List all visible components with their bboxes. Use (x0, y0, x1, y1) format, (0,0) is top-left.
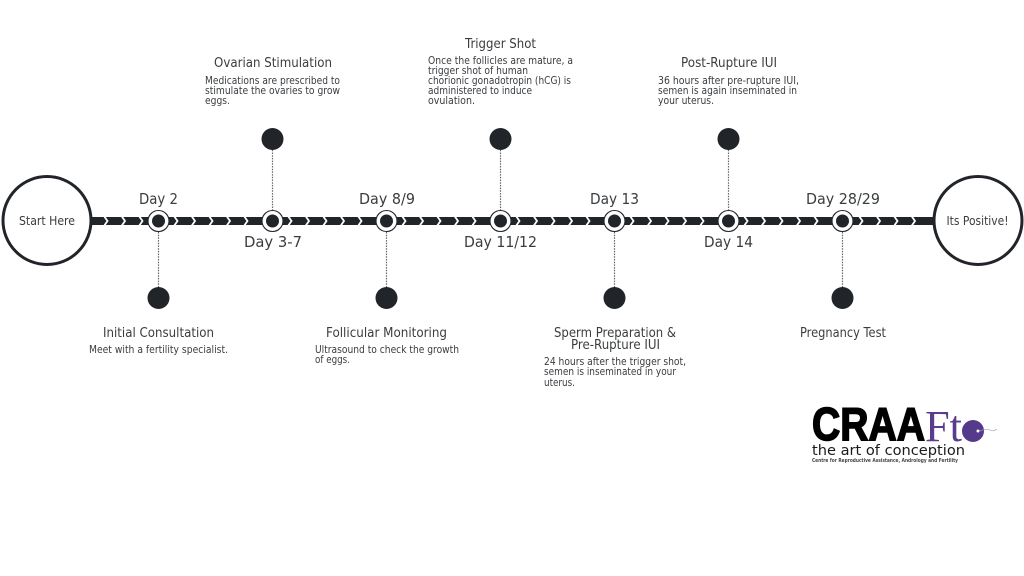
milestone: Day 14 Post-Rupture IUI: your uterus. (658, 95, 714, 107)
end circle (934, 176, 1022, 264)
milestone: Day 8/9 Follicular Monitoring (315, 190, 459, 366)
milestone: Day 14 Post-Rupture IUI: 36 hours after pre-rupture IUI, (658, 75, 799, 87)
milestone: Day 11/12 Trigger Shot: ovulation. (428, 95, 475, 107)
milestone: Day 11/12 Trigger Shot: trigger shot of human (428, 65, 528, 77)
milestone: Day 14 Post-Rupture IUI: Post-Rupture IUI (681, 55, 777, 71)
milestone: Day 2 Initial Consultation: Initial Consultation (103, 325, 214, 341)
milestone: Day 11/12 Trigger Shot: administered to induce (428, 85, 532, 97)
milestone: Day 14 Post-Rupture IUI: Day 14 (704, 233, 753, 251)
milestone: Day 3-7 Ovarian Stimulation: eggs. (205, 95, 230, 107)
logo: CRAAFt: Centre for Reproductive Assistance, Andrology and Fertility (812, 458, 959, 464)
milestone: Day 3-7 Ovarian Stimulation: stimulate the ovaries to grow (205, 85, 340, 97)
logo: CRAAFt: the art of conception (812, 443, 965, 459)
milestone: Day 28/29 Pregnancy Test: Pregnancy Test (800, 325, 886, 341)
milestone: Day 13 Sperm Preparation: uterus. (544, 377, 575, 389)
dotted connectors (158, 139, 842, 298)
milestone: Day 11/12 Trigger Shot: Trigger Shot (464, 36, 536, 52)
milestone: Day 11/12 Trigger Shot: chorionic gonadotropin (hCG) is (428, 75, 571, 87)
milestone: Day 3-7 Ovarian Stimulation: Day 3-7 (244, 233, 302, 251)
milestone: Day 8/9 Follicular Monitoring: Follicular Monitoring (326, 325, 447, 341)
milestone: Day 8/9 Follicular Monitoring: of eggs. (315, 354, 350, 366)
milestone: Day 8/9 Follicular Monitoring: Day 8/9 (359, 190, 415, 208)
milestone: Day 3-7 Ovarian Stimulation: Ovarian Stimulation (214, 55, 332, 71)
milestone: Day 13 Sperm Preparation (544, 190, 686, 389)
milestone: Day 11/12 Trigger Shot (428, 36, 573, 251)
milestone: Day 2 Initial Consultation: Day 2 (139, 190, 178, 208)
milestone: Day 2 Initial Consultation: Meet with a fertility specialist. (89, 344, 228, 356)
milestone: Day 13 Sperm Preparation: Sperm Preparation & (554, 325, 676, 341)
milestone: Day 28/29 Pregnancy Test: Day 28/29 (806, 190, 880, 208)
end circle: Its Positive! (946, 214, 1008, 228)
start circle (3, 176, 91, 264)
logo: CRAAFt: CRAA (812, 398, 925, 450)
start circle: Start Here (19, 214, 75, 228)
milestone: Day 2 Initial Consultation (89, 190, 228, 356)
milestone: Day 8/9 Follicular Monitoring: Ultrasound to check the growth (315, 344, 459, 356)
milestone: Day 28/29 Pregnancy Test (800, 190, 886, 341)
logo: CRAAFt: Ft (925, 402, 962, 451)
milestone: Day 13 Sperm Preparation: 24 hours after the trigger shot, (544, 356, 686, 368)
milestone: Day 14 Post-Rupture IUI: semen is again inseminated in (658, 85, 797, 97)
milestone: Day 13 Sperm Preparation: semen is inseminated in your (544, 366, 677, 378)
milestone: Day 13 Sperm Preparation: Day 13 (590, 190, 639, 208)
milestone: Day 3-7 Ovarian Stimulation (205, 55, 340, 251)
timeline bar with chevrons (90, 216, 935, 226)
milestone: Day 11/12 Trigger Shot: Day 11/12 (464, 233, 537, 251)
milestone: Day 13 Sperm Preparation: Pre-Rupture IUI (571, 337, 660, 353)
logo: CRAAFt (812, 398, 997, 464)
milestone: Day 3-7 Ovarian Stimulation: Medications are prescribed to (205, 75, 340, 87)
milestone: Day 11/12 Trigger Shot: Once the follicles are mature, a (428, 55, 573, 67)
milestone: Day 14 Post-Rupture IUI (658, 55, 799, 251)
